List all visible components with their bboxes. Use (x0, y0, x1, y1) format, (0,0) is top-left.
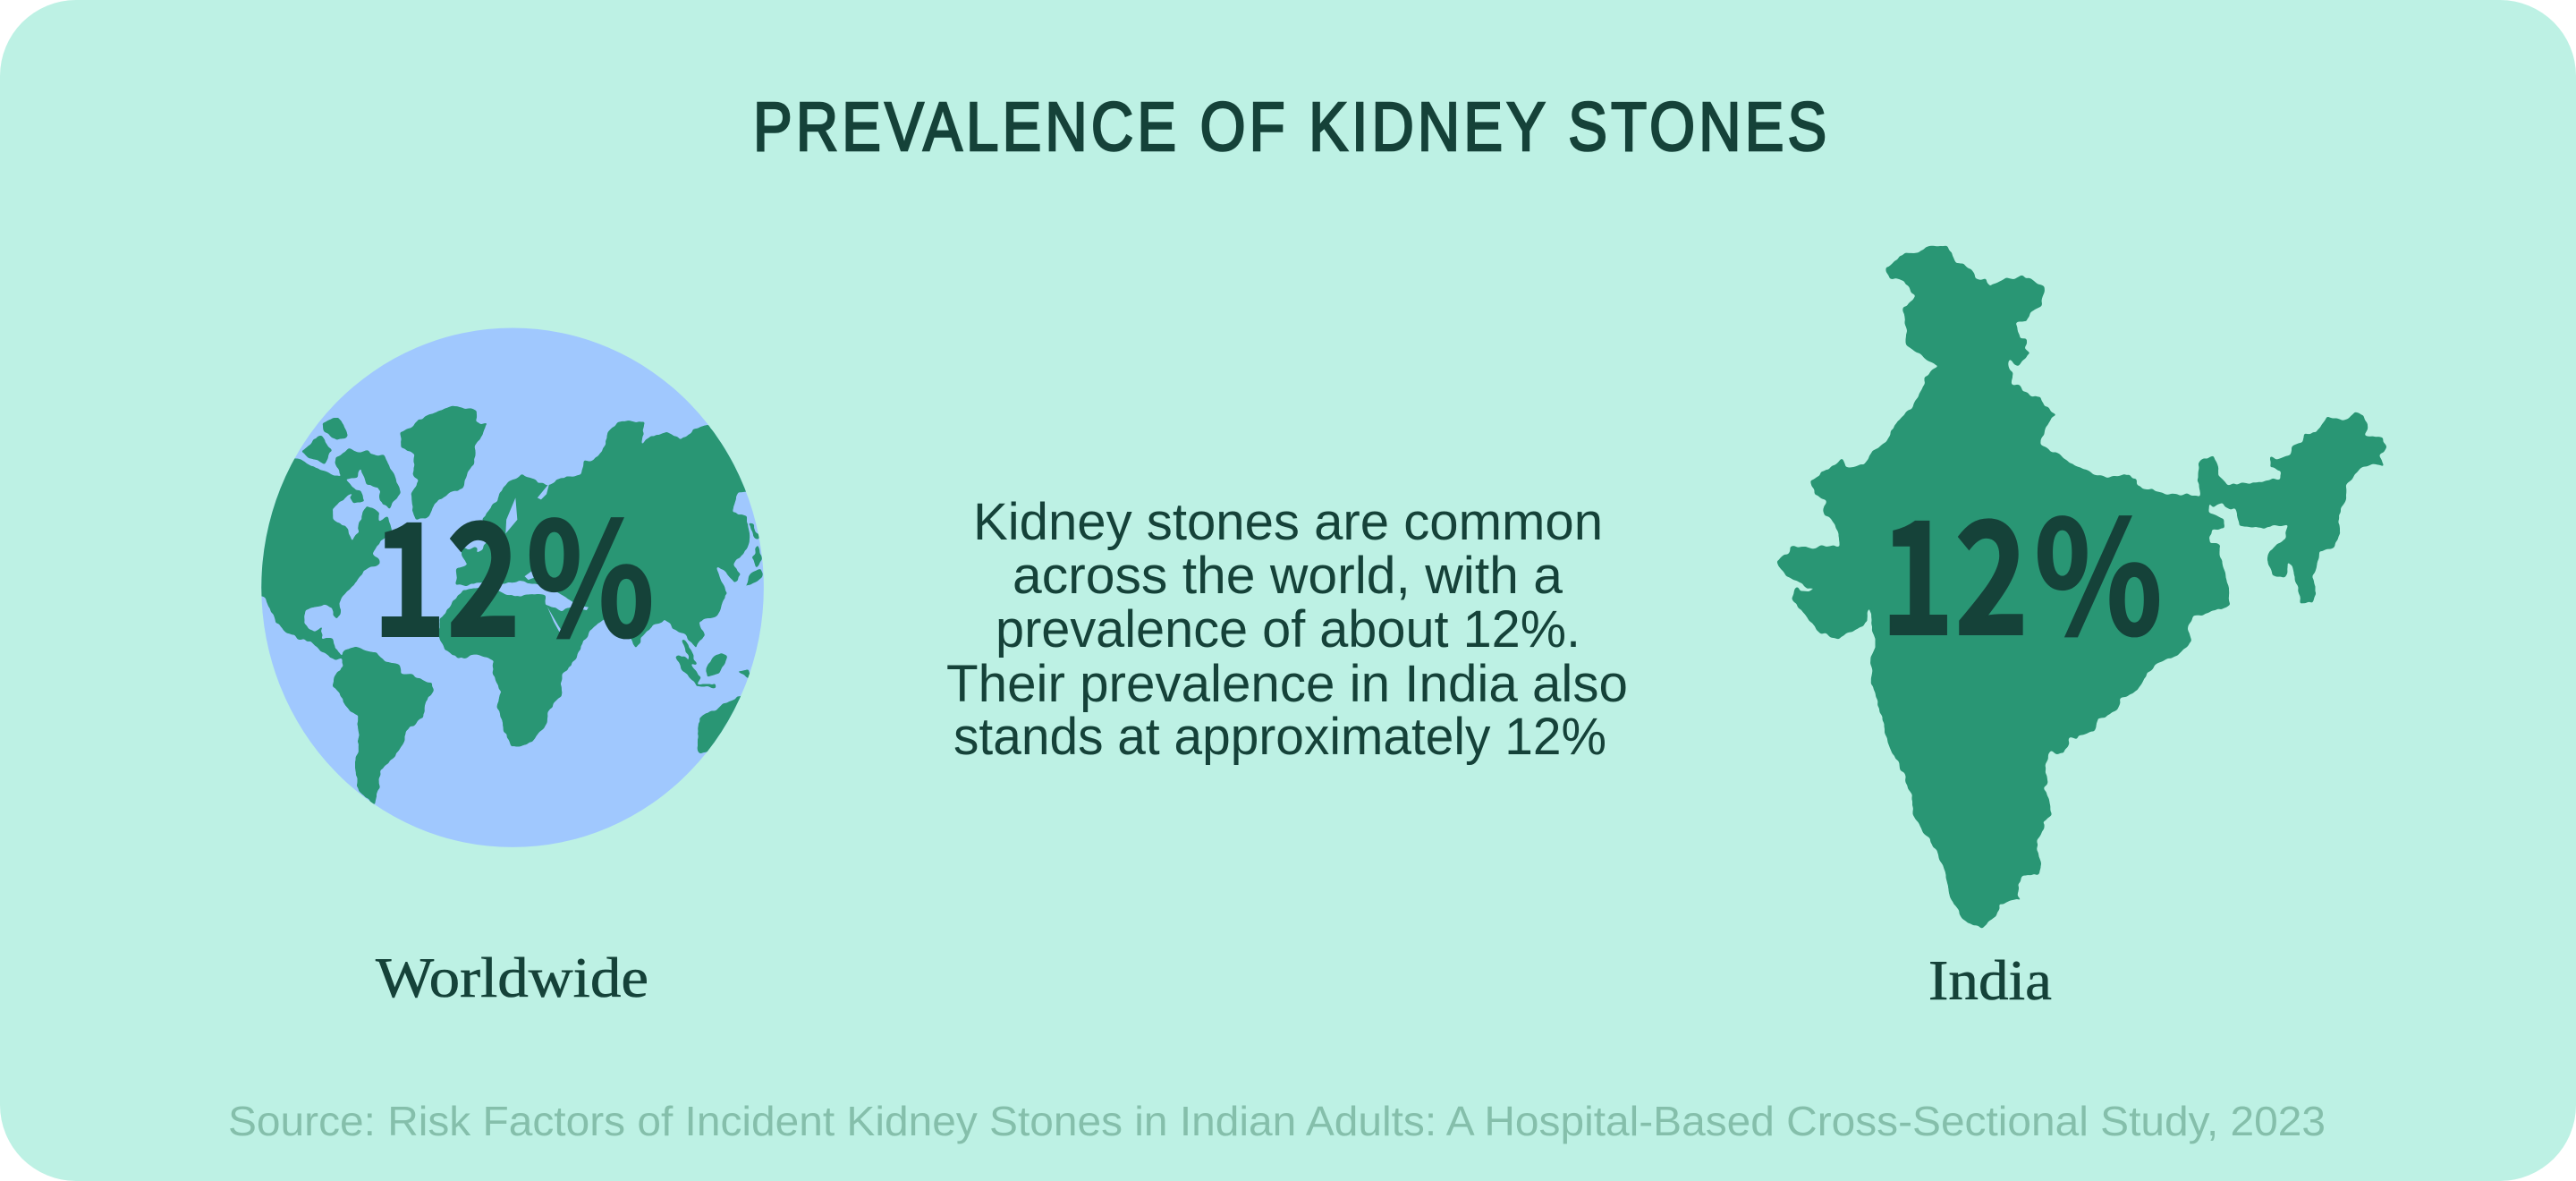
label: worldwide: Worldwide (376, 947, 648, 1009)
stat: worldwide 12%: 12 (372, 455, 521, 682)
stat: india 12%: % (2034, 454, 2163, 680)
body text (946, 493, 1628, 766)
panel: worldwide (247, 328, 764, 1009)
body text: prevalence of about 12%. (996, 600, 1580, 658)
stat: india 12%: 12 (1880, 454, 2029, 680)
stat: worldwide 12% (372, 455, 655, 682)
body text: across the world, with a (1013, 547, 1563, 605)
body text: stands at approximately 12% (953, 708, 1606, 766)
stat: worldwide 12%: % (526, 455, 655, 682)
title: PREVALENCE OF KIDNEY STONES (753, 89, 1826, 166)
icon: globe (247, 328, 764, 847)
panel: india (1776, 248, 2385, 1012)
icon: india map (1776, 248, 2385, 927)
body text: Their prevalence in India also (946, 655, 1628, 713)
source: Source: Risk Factors of Incident Kidney Stones in Indian Adults: A Hospital-Based Cross-Sectional Study, 2023 (228, 1098, 2326, 1144)
label: india: India (1928, 949, 2052, 1012)
body text: Kidney stones are common (973, 493, 1603, 551)
stat: india 12% (1880, 454, 2163, 680)
